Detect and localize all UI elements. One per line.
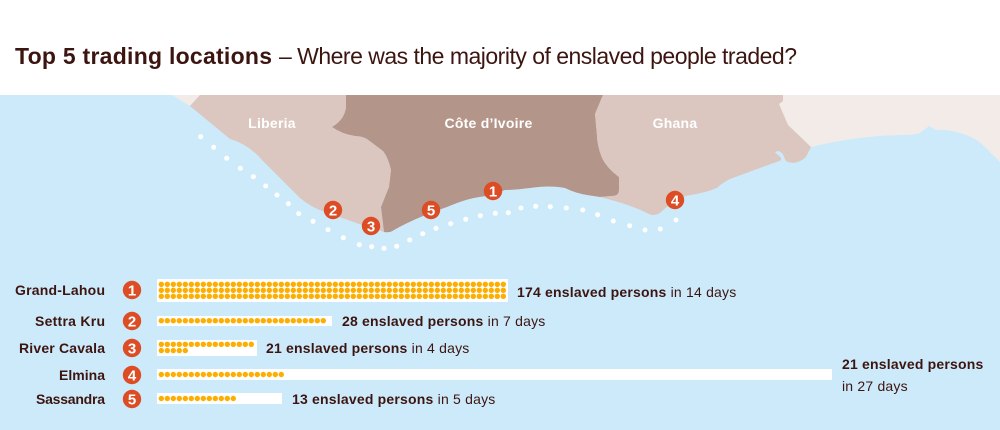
row: Settra Kru bbox=[35, 312, 545, 330]
row: Elmina bbox=[59, 356, 984, 394]
row: Grand-Lahou: Grand-Lahou bbox=[15, 282, 105, 298]
row: Settra Kru: 28 enslaved persons in 7 days bbox=[342, 313, 545, 329]
row: River Cavala: 21 enslaved persons in 4 days bbox=[266, 340, 469, 356]
map marker 2 bbox=[324, 201, 342, 219]
row: Elmina: Elmina bbox=[59, 367, 105, 383]
country: Liberia bbox=[190, 95, 391, 232]
row: Settra Kru: Settra Kru bbox=[35, 313, 105, 329]
map marker 4 bbox=[666, 191, 684, 209]
row: Sassandra: Sassandra bbox=[36, 391, 105, 407]
country: Ghana bbox=[595, 95, 811, 215]
row: Elmina: in 27 days bbox=[842, 378, 908, 394]
row: Sassandra: 5 bbox=[128, 391, 136, 408]
map marker 3: 3 bbox=[367, 218, 375, 235]
title: – Where was the majority of enslaved people traded? bbox=[279, 43, 797, 69]
label: Ghana: Ghana bbox=[653, 115, 697, 131]
label: Liberia: Liberia bbox=[248, 115, 296, 131]
label: Côte d'Ivoire: Côte d’Ivoire bbox=[444, 115, 533, 131]
row: Sassandra bbox=[36, 390, 495, 408]
row: River Cavala: 3 bbox=[128, 340, 136, 357]
map marker 4: 4 bbox=[671, 192, 680, 209]
country: Côte d'Ivoire bbox=[332, 95, 619, 232]
row: Grand-Lahou: 1 bbox=[128, 282, 136, 299]
land: neighbouring east bbox=[779, 95, 1000, 162]
title: Top 5 trading locations bbox=[15, 43, 272, 69]
map marker 3 bbox=[362, 217, 380, 235]
map marker 5 bbox=[422, 201, 440, 219]
row: Elmina: 21 enslaved persons bbox=[842, 356, 984, 372]
ocean background bbox=[0, 95, 1000, 430]
map marker 1: 1 bbox=[489, 183, 497, 200]
row: Grand-Lahou: 174 enslaved persons in 14 days bbox=[517, 284, 736, 300]
row: River Cavala bbox=[19, 339, 469, 357]
land: neighbouring west bbox=[172, 95, 200, 106]
map marker 2: 2 bbox=[329, 202, 337, 219]
row: Elmina: 4 bbox=[128, 367, 137, 384]
map bbox=[172, 95, 1000, 232]
ship route dotted line bbox=[198, 134, 678, 251]
row: Settra Kru: 2 bbox=[128, 313, 136, 330]
row: Sassandra: 13 enslaved persons in 5 days bbox=[292, 391, 495, 407]
map marker 5: 5 bbox=[427, 202, 435, 219]
row: Grand-Lahou bbox=[15, 279, 736, 302]
map marker 1 bbox=[484, 182, 502, 200]
title bbox=[15, 43, 797, 69]
row: River Cavala: River Cavala bbox=[19, 340, 105, 356]
